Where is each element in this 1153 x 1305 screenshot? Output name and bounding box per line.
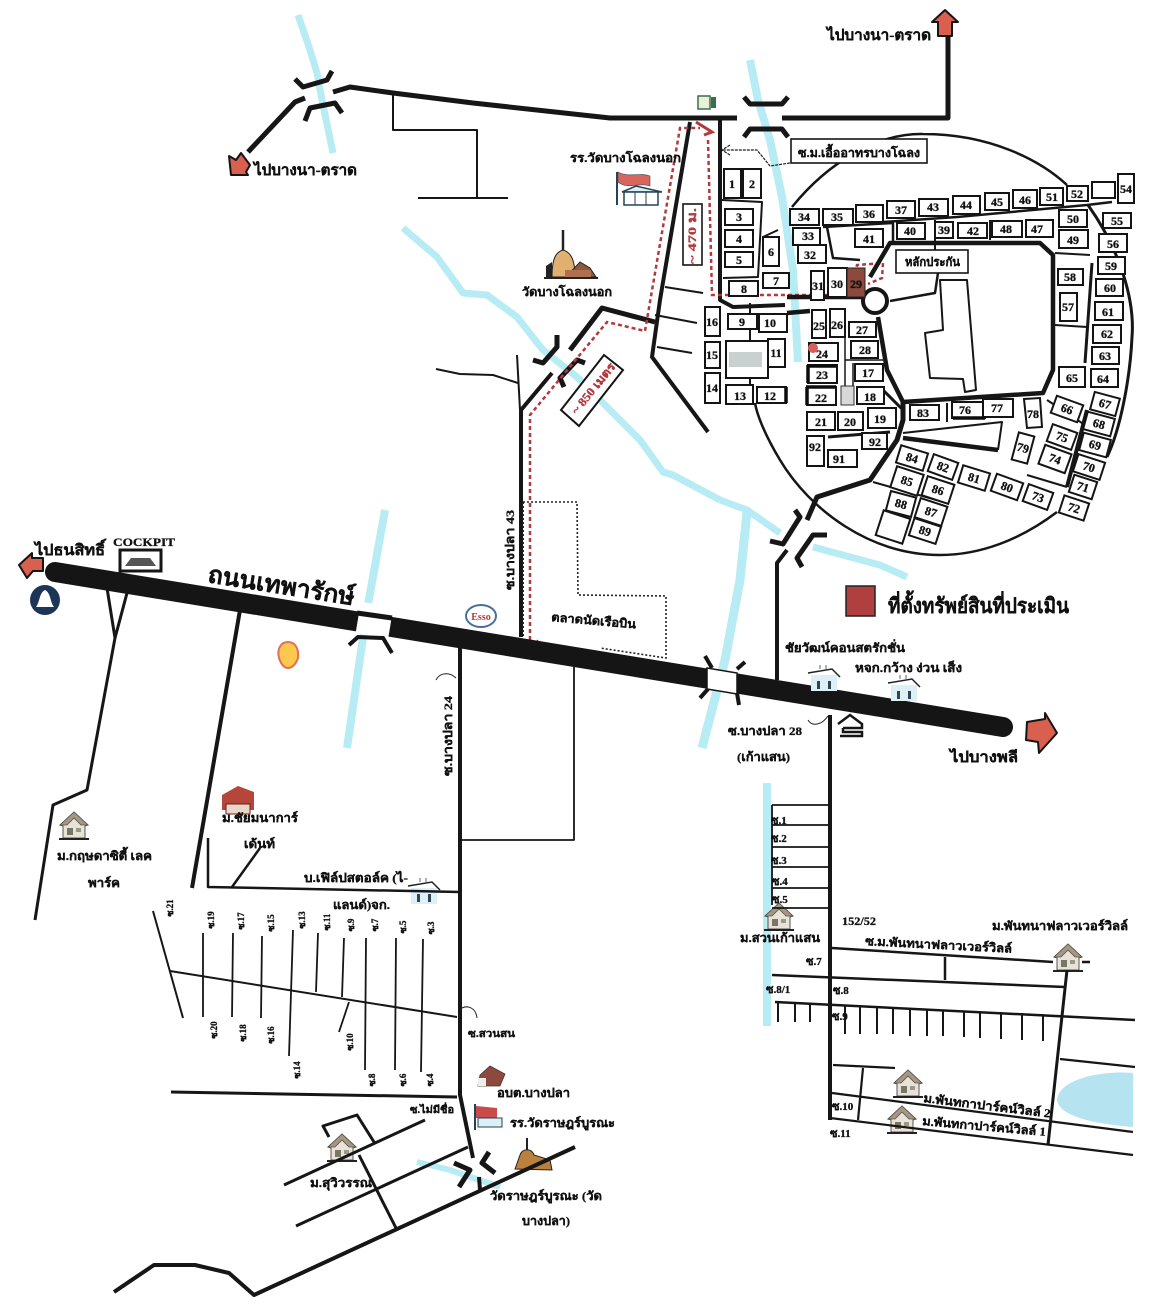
numbered lots, centre block: 76 [959,403,971,417]
place labels south west: เด้นท์ [244,837,275,851]
numbered lots, west block: 8 [741,282,747,296]
numbered lots, north row: 42 [967,224,979,238]
icon: shop east [888,675,920,701]
south west roads [35,588,575,1295]
numbered lots, west block: 4 [736,232,742,246]
legend [846,586,1070,618]
numbered lots, angled east and south: 87 [923,503,939,521]
place labels south east: 152/52 [842,914,876,928]
numbered lots, north row: 44 [960,198,972,212]
legend: ที่ตั้งทรัพย์สินที่ประเมิน [888,590,1070,618]
vertical soi labels: ซ.บางปลา 43 [503,510,517,590]
place labels south west: ม.สุวิวรรณ [310,1176,372,1191]
place labels north: ซ.บางปลา 28 [728,724,802,738]
place labels south east: ซ.8 [833,985,849,997]
place labels south east: ม.พันทกาปาร์คน์วิลล์ 2 [923,1091,1051,1121]
vertical soi labels: ซ.14 [292,1061,302,1079]
numbered lots, west block: 11 [770,346,782,360]
place labels south east: ซ.11 [830,1128,851,1140]
place labels south east: ซ.4 [772,876,788,888]
icon: house west [59,812,89,839]
vertical soi labels: ซ.8 [367,1073,377,1086]
numbered lots, centre block: 30 [831,277,843,291]
numbered lots, angled east and south: 86 [930,481,946,499]
place labels north: วัดบางโฉลงนอก [522,284,612,299]
label: collateral box [896,250,968,273]
icon: shop north [808,665,840,691]
numbered lots, centre block: 78 [1027,407,1039,421]
numbered lots, north row: 41 [863,232,875,246]
place labels south west: ซ.ไม่มีชื่อ [410,1102,454,1116]
icon: house park ville 2 [893,1070,923,1097]
numbered lots, west block: 12 [764,389,776,403]
numbered lots, north row: 47 [1031,222,1043,236]
label: housing project box: ซ.ม.เอื้ออาทรบางโฉลง [798,143,920,160]
heavy lot edges [786,365,985,418]
vertical soi labels: ซ.บางปลา 24 [441,696,455,776]
label: housing project box [791,139,927,163]
numbered lots, centre block: 18 [864,390,876,404]
numbered lots, north row [790,174,1134,263]
place labels south east: ซ.10 [832,1101,854,1113]
icon: school south [475,1104,502,1130]
numbered lots, angled east and south: 80 [999,478,1015,496]
place labels north: ตลาดนัดเรือบิน [551,610,637,631]
numbered lots, north row: 51 [1046,190,1058,204]
icon: esso [466,605,496,627]
numbered lots, west block: 3 [736,210,742,224]
vertical soi labels [165,510,517,1086]
vertical soi labels: ซ.20 [209,1021,219,1039]
main road Thepharak [55,572,1003,727]
numbered lots, east column: 56 [1107,237,1119,251]
place labels south west: บางปลา) [522,1214,570,1228]
vertical soi labels: ซ.21 [165,899,175,917]
numbered lots, north row: 54 [1120,182,1132,196]
numbered lots, centre block [807,268,1042,467]
numbered lots, north row: 46 [1019,193,1031,207]
numbered lots, north row: 50 [1067,212,1079,226]
numbered lots, east column: 58 [1064,270,1076,284]
numbered lots, angled east and south: 81 [966,470,982,486]
numbered lots, west block [705,169,789,404]
market dotted outline [523,502,666,658]
numbered lots, centre block: 24 [816,347,828,361]
numbered lots, angled east and south: 89 [917,522,933,540]
distance label 470 m [683,204,702,265]
place labels south west: ซ.สวนสน [468,1029,515,1040]
numbered lots, centre block: 20 [844,415,856,429]
numbered lots, centre block: 22 [815,391,827,405]
place labels south east: ซ.5 [772,894,788,906]
numbered lots, angled east and south: 66 [1059,400,1075,418]
numbered lots, centre block: 28 [859,343,871,357]
numbered lots, west block: 6 [768,245,774,259]
vertical soi labels: ซ.9 [346,918,356,931]
direction arrow: west: ไปธนสิทธิ์ [33,538,107,559]
numbered lots, centre block: 17 [862,366,874,380]
direction arrow: east [948,713,1057,766]
numbered lots, centre block: 25 [813,319,825,333]
icon: house Suwan [327,1134,357,1161]
place labels north: (เก้าแสน) [737,750,790,764]
icon: esso: Esso [471,612,491,623]
numbered lots, angled east and south: 67 [1097,396,1113,412]
vertical soi labels: ซ.5 [398,920,408,933]
numbered lots, angled east and south [876,392,1120,544]
place labels south west: รร.วัดราษฎร์บูรณะ [510,1116,615,1131]
place labels north: รร.วัดบางโฉลงนอก [570,150,681,165]
numbered lots, angled east and south: 85 [899,472,915,490]
subject property lot 29 [847,268,865,297]
icon: house park ville 1 [887,1106,917,1133]
direction arrow: top left [229,153,357,179]
numbered lots, north row: 34 [798,210,810,224]
numbered lots, centre block: 91 [833,452,845,466]
numbered lots, centre block: 77 [991,401,1003,415]
numbered lots, angled east and south: 79 [1015,440,1031,456]
subject property lot 29: 29 [850,277,862,291]
numbered lots, centre block: 19 [874,412,886,426]
place labels south east: ม.สวนเก้าแสน [740,931,821,945]
place labels south west: แลนด์)จก. [333,898,390,912]
place labels south west: บ.เฟิล์ปสตอล์ค (ไ- [304,870,408,885]
numbered lots, north row: 43 [927,200,939,214]
icon: temple south [515,1138,552,1170]
icon: red house [222,786,254,814]
numbered lots, west block: 2 [749,177,755,191]
place labels south east: ซ.1 [771,815,787,827]
numbered lots, angled east and south: 69 [1087,437,1103,453]
numbered lots, north row: 39 [938,223,950,237]
vertical soi labels: ซ.17 [236,912,246,930]
place labels south east: ม.พันทนาฟลาวเวอร์วิลล์ [992,919,1128,933]
vertical soi labels: ซ.4 [425,1073,435,1086]
numbered lots, north row: 33 [802,229,814,243]
vertical soi labels: ซ.6 [398,1073,408,1086]
icon: bell badge [30,585,60,615]
icon: OBT office [478,1066,505,1086]
numbered lots, centre block: 21 [815,415,827,429]
vertical soi labels: ซ.11 [322,913,332,930]
vertical soi labels: ซ.19 [206,911,216,929]
icon: cockpit [113,535,175,571]
vertical soi labels: ซ.10 [345,1033,355,1051]
vertical soi labels: ซ.7 [370,918,380,931]
icon: cockpit: COCKPIT [113,535,175,549]
numbered lots, east column: 59 [1105,259,1117,273]
distance label 850 m [561,355,623,426]
place labels south west [57,811,615,1228]
numbered lots, east column [1058,213,1131,387]
numbered lots, angled east and south: 68 [1091,416,1107,432]
numbered lots, west block: 16 [706,315,718,329]
numbered lots, north row: 49 [1067,233,1079,247]
vertical soi labels: ซ.15 [266,914,276,932]
direction arrow: top right [825,10,958,44]
numbered lots, east column: 55 [1111,214,1123,228]
place labels south east: ซ.8/1 [766,984,790,996]
numbered lots, west block: 15 [706,348,718,362]
place labels south east: ซ.7 [806,956,822,968]
south east roads [772,715,1135,1155]
place labels south west: ม.กฤษดาซิตี้ เลค [57,846,152,863]
numbered lots, north row: 45 [991,195,1003,209]
icon: logo on soi 28 [838,715,862,736]
numbered lots, north row: 32 [804,248,816,262]
label: collateral box: หลักประกัน [905,255,961,269]
icon: shop west [408,878,440,904]
numbered lots, east column: 64 [1097,372,1109,386]
place labels south west: วัดราษฎร์บูรณะ (วัด [490,1189,602,1204]
numbered lots, angled east and south: 88 [893,496,909,512]
numbered lots, north row: 40 [904,224,916,238]
numbered lots, angled east and south: 70 [1081,458,1097,476]
place labels south west: ม.ชัยมนาการ์ [222,811,299,825]
top road network [248,35,948,432]
distance label 470 m: ~ 470 ม. [685,208,699,264]
icon: temple top [544,230,598,278]
icon: house flower ville [1053,944,1083,971]
numbered lots, centre block: 27 [856,323,868,337]
icon: school top [617,172,662,205]
vertical soi labels: ซ.3 [426,921,436,934]
numbered lots, west block: 14 [706,381,718,395]
numbered lots, centre block: 92 [869,435,881,449]
numbered lots, angled east and south: 71 [1075,478,1091,496]
numbered lots, east column: 65 [1066,371,1078,385]
numbered lots, north row: 35 [831,210,843,224]
numbered lots, centre block: 26 [831,318,843,332]
numbered lots, east column: 62 [1101,327,1113,341]
direction arrow: top left: ไปบางนา-ตราด [252,160,357,179]
place labels north: หจก.กว้าง ง่วน เส็ง [855,660,962,675]
estate block network [722,134,1132,680]
icon: small shrine and red marker [808,343,854,405]
bridge: south estate crossing [770,510,827,567]
numbered lots, west block: 1 [729,177,735,191]
bridge: south crossing [454,1152,495,1187]
place labels south east: ซ.2 [771,833,787,845]
dashed pointer to road [722,145,790,166]
numbered lots, north row: 37 [895,203,907,217]
numbered lots, angled east and south: 73 [1030,488,1046,506]
direction arrow: top right: ไปบางนา-ตราด [825,25,931,44]
vertical soi labels: ซ.18 [238,1024,248,1042]
numbered lots, west block: 10 [764,316,776,330]
numbered lots, angled east and south: 82 [935,458,951,476]
numbered lots, angled east and south: 72 [1066,499,1082,517]
numbered lots, centre block: 83 [917,406,929,420]
numbered lots, north row: 36 [863,207,875,221]
place labels north [522,150,962,764]
numbered lots, centre block: 31 [812,279,824,293]
numbered lots, angled east and south: 74 [1047,450,1063,468]
place labels north: ชัยวัฒน์คอนสตรักชั่น [785,639,906,655]
place labels south east: ซ.9 [832,1011,848,1023]
place labels south east: ซ.3 [771,855,787,867]
rivers [298,15,1133,1187]
numbered lots, north row: 48 [1000,222,1012,236]
numbered lots, west block: 5 [736,253,742,267]
icon: shell [278,642,298,668]
place labels south east [740,815,1128,1140]
numbered lots, east column: 60 [1104,281,1116,295]
route dashed red [522,122,883,648]
numbered lots, west block: 13 [734,389,746,403]
bridge: west canal crossing [295,71,342,121]
distance label 850 m: ~ 850 เมตร [568,359,619,417]
numbered lots, angled east and south: 84 [904,450,920,466]
small road curve ticks [436,674,828,1018]
numbered lots, centre block: 92 [809,440,821,454]
bridge: crossing by 7-Eleven [744,97,788,137]
bridge: middle canal crossing [533,335,585,387]
place labels south west: อบต.บางปลา [497,1086,570,1100]
vertical soi labels: ซ.16 [266,1026,276,1044]
direction arrow: west [19,538,107,578]
roundabout [863,289,887,313]
numbered lots, east column: 61 [1102,305,1114,319]
numbered lots, west block: 7 [773,274,779,288]
soi Bang Pla 43 road [436,308,655,637]
icon: 7-eleven [698,96,716,109]
numbered lots, centre block: 23 [816,368,828,382]
place labels south east: ซ.ม.พันทนาฟลาวเวอร์วิลล์ [865,934,1012,956]
numbered lots, east column: 57 [1062,300,1074,314]
numbered lots, north row: 52 [1071,187,1083,201]
road name: ถนนเทพารักษ์ [206,560,357,611]
numbered lots, angled east and south: 75 [1054,428,1070,446]
place labels south east: ม.พันทกาปาร์คน์วิลล์ 1 [922,1114,1046,1139]
vertical soi labels: ซ.13 [297,911,307,929]
place labels south west: พาร์ค [88,876,120,890]
direction arrow: east: ไปบางพลี [948,747,1018,766]
numbered lots, west block: 9 [739,315,745,329]
numbered lots, east column: 63 [1099,349,1111,363]
icon: house Suan Kao Saen [764,903,794,930]
